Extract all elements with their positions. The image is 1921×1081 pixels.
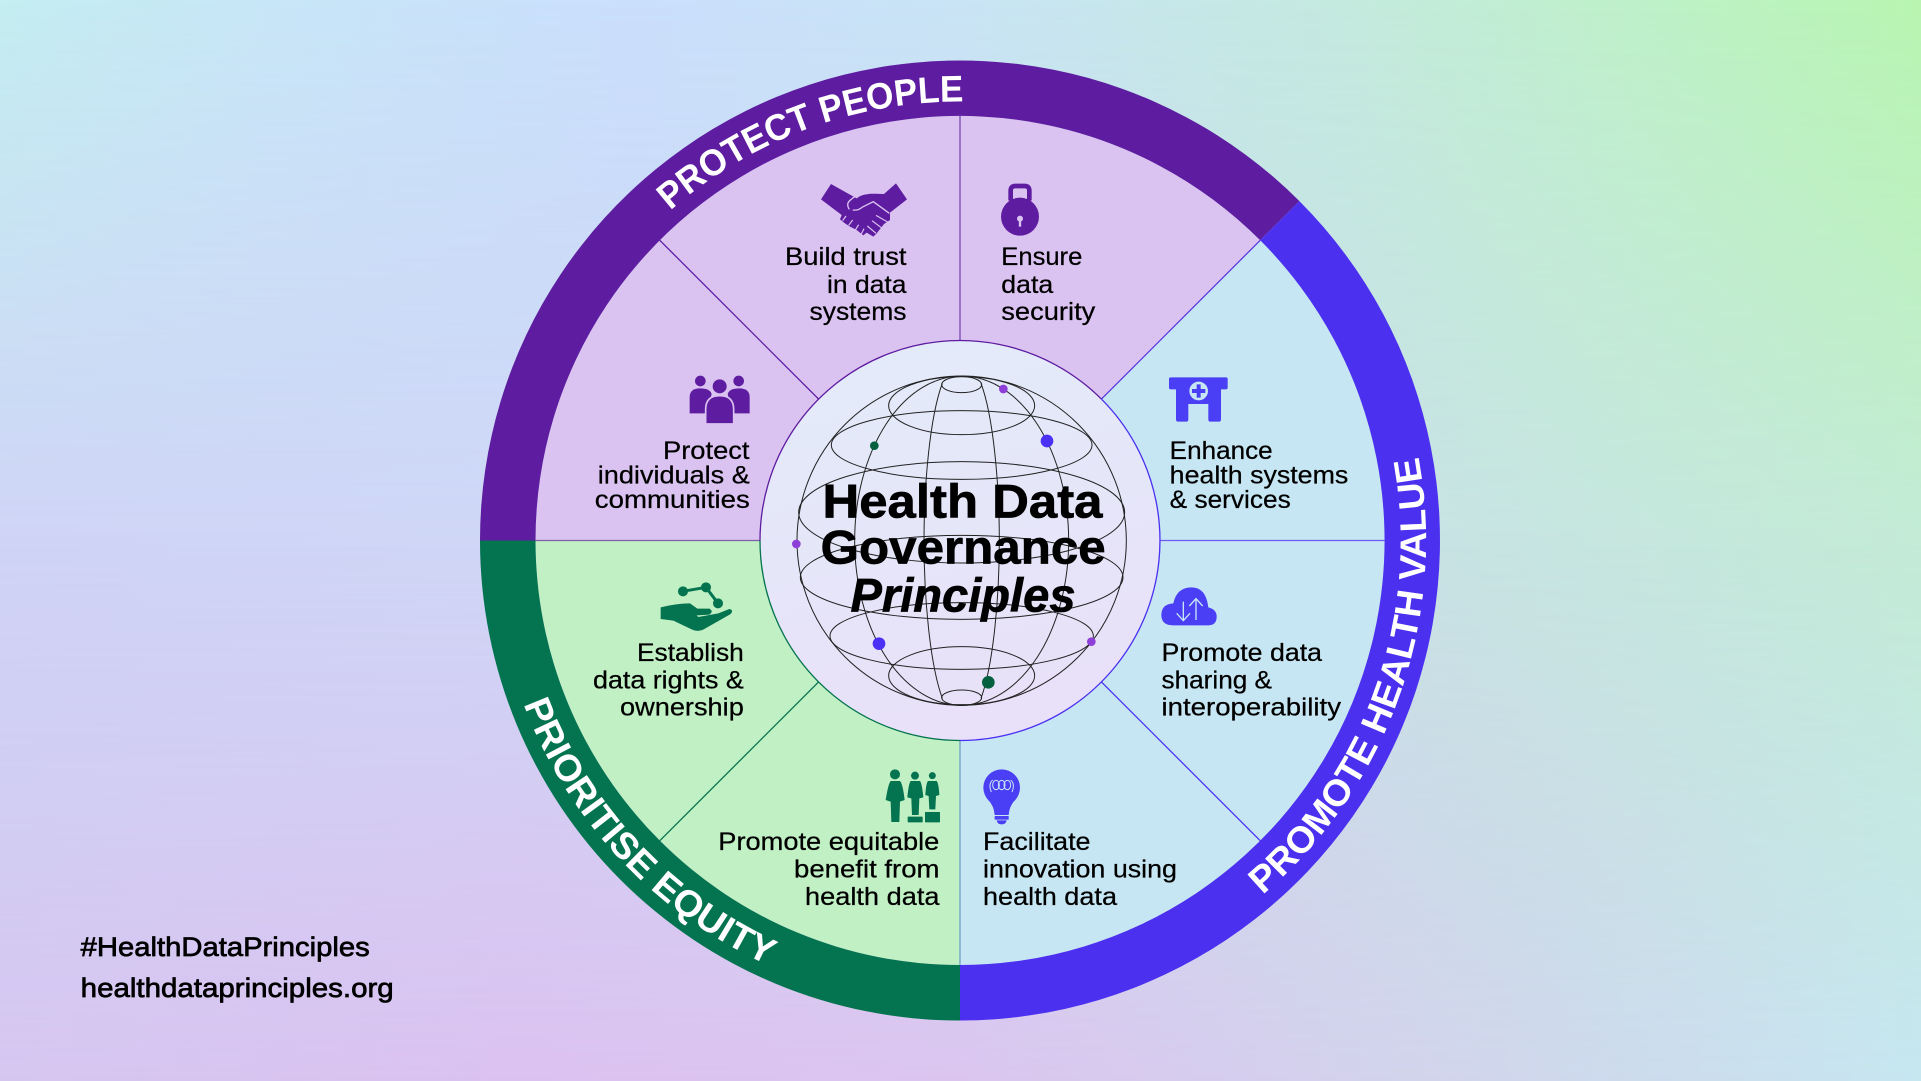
text: build trust: Build trust <box>785 243 907 271</box>
text: promote data sharing: Promote data <box>1162 639 1322 667</box>
text: facilitate innovation: Facilitate <box>983 828 1090 856</box>
footer: hashtag and website <box>81 932 394 1003</box>
title: Health Data <box>822 475 1103 528</box>
band: protect people <box>480 60 1300 540</box>
panel: promote health value sector <box>960 240 1385 965</box>
text: ensure data security <box>1001 243 1096 326</box>
band: prioritise equity: PRIORITISE EQUITY <box>524 696 778 961</box>
text: build trust: in data <box>827 271 907 299</box>
text: enhance health systems <box>1170 437 1348 514</box>
text: protect individuals: communities <box>595 486 750 514</box>
title <box>821 475 1106 622</box>
text: promote data sharing: sharing & <box>1162 667 1272 695</box>
text: establish data rights <box>593 639 744 722</box>
title: Governance <box>821 520 1106 573</box>
text: promote equitable benefit: health data <box>805 883 940 911</box>
band: promote health value: PROMOTE HEALTH VALUE <box>1248 458 1426 894</box>
text: protect individuals: Protect <box>663 437 750 465</box>
icon: handshake <box>821 183 907 237</box>
text: promote equitable benefit: Promote equitable <box>718 828 939 856</box>
text: enhance health systems: health systems <box>1170 462 1348 490</box>
footer: hashtag and website: #HealthDataPrinciples <box>81 932 370 962</box>
text: promote data sharing: interoperability <box>1162 694 1342 722</box>
text: enhance health systems: & services <box>1170 486 1291 514</box>
text: promote equitable benefit: benefit from <box>794 856 940 884</box>
icon: hand with data nodes <box>661 582 732 631</box>
center disc with globe and title <box>760 340 1160 740</box>
footer: hashtag and website: healthdataprinciples.org <box>81 973 394 1003</box>
text: build trust <box>785 243 907 326</box>
text: protect individuals: individuals & <box>598 462 750 490</box>
text: ensure data security: data <box>1001 271 1053 299</box>
band: promote health value <box>960 201 1440 1020</box>
globe <box>792 376 1126 705</box>
icon: hospital <box>1169 377 1228 422</box>
text: establish data rights: Establish <box>637 639 744 667</box>
title: Principles <box>850 569 1076 622</box>
icon: lightbulb <box>983 769 1020 824</box>
text: ensure data security: security <box>1001 298 1096 326</box>
text: facilitate innovation: health data <box>983 883 1117 911</box>
icon: padlock <box>1001 186 1039 236</box>
text: establish data rights: ownership <box>620 694 744 722</box>
text: facilitate innovation <box>983 828 1177 911</box>
text: protect individuals <box>595 437 750 514</box>
band: prioritise equity <box>480 540 960 1020</box>
icon: three figures on boxes <box>886 769 940 822</box>
text: facilitate innovation: innovation using <box>983 856 1177 884</box>
icon: cloud <box>1161 587 1217 625</box>
text: establish data rights: data rights & <box>593 667 744 695</box>
text: build trust: systems <box>810 298 906 326</box>
text: promote data sharing <box>1162 639 1342 722</box>
text: ensure data security: Ensure <box>1001 243 1082 271</box>
panel: protect people sector <box>536 116 1260 540</box>
text: promote equitable benefit <box>718 828 940 911</box>
panel: prioritise equity sector <box>536 540 960 965</box>
text: enhance health systems: Enhance <box>1170 437 1273 465</box>
icon: people <box>690 376 750 424</box>
band: protect people: PROTECT PEOPLE <box>656 76 962 210</box>
